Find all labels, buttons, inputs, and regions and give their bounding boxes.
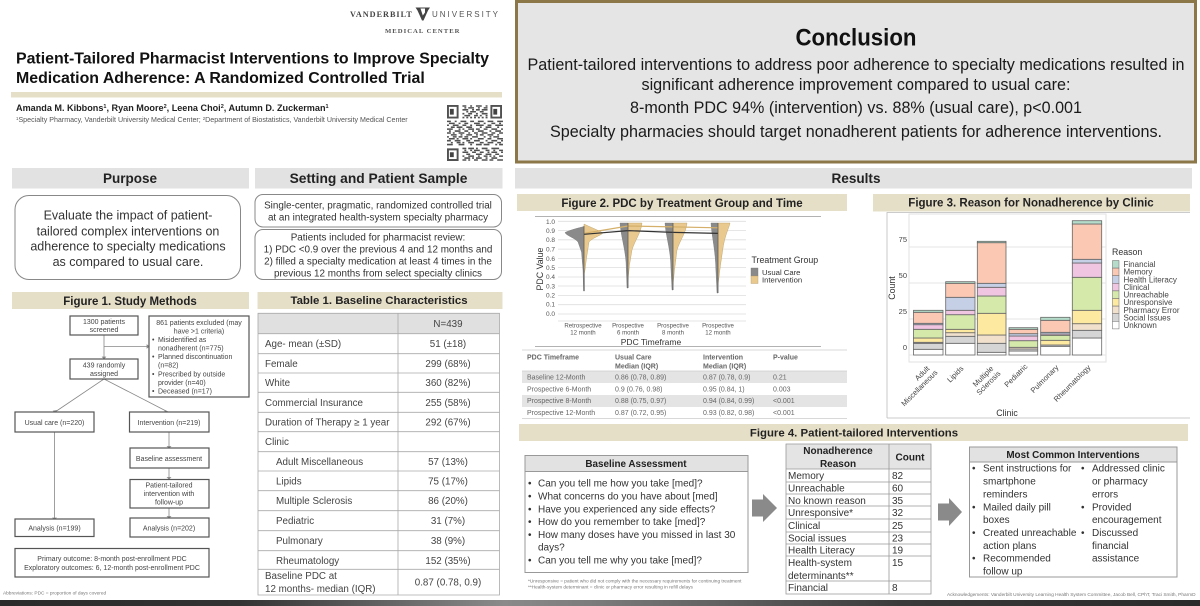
table 1 grid: 12 months- median (IQR) <box>265 584 376 595</box>
usual care violins <box>565 223 718 293</box>
nonadherence reason table: 25 <box>892 521 904 532</box>
table 1 grid: 255 (58%) <box>425 398 471 409</box>
x axis labels <box>564 322 735 336</box>
authors: 2 <box>164 104 167 110</box>
panel: setting and patient sample <box>255 168 502 280</box>
baseline assessment box: Can you tell me how you take [med]? <box>538 478 703 490</box>
most common interventions box: • <box>972 554 976 564</box>
box: outcomes: Primary outcome: 8-month post-enrollment PDC <box>37 556 187 563</box>
violin chart: 0.9 <box>546 228 555 235</box>
bar: pediatric <box>1009 328 1038 355</box>
x axis clinic labels: Sclerosis <box>975 369 1003 397</box>
most common interventions box: reminders <box>983 490 1027 500</box>
authors: 1 <box>103 104 106 110</box>
figure 3 heading: Figure 3. Reason for Nonadherence by Clinic <box>908 198 1154 210</box>
authors: Amanda M. Kibbons <box>16 103 103 113</box>
logo: Vanderbilt University Medical Center: UNIVERSITY <box>432 10 500 19</box>
panel: figure 2 PDC by treatment group and time <box>517 194 847 418</box>
box: outcomes: Exploratory outcomes: 6, 12-month post-enrollment PDC <box>24 565 200 572</box>
violin chart: PDC Timeframe <box>621 337 681 347</box>
table 1 grid: 292 (67%) <box>425 418 471 428</box>
panel: table 1 baseline characteristics <box>258 292 502 595</box>
most common interventions box: or pharmacy <box>1092 476 1148 488</box>
most common interventions box: Recommended <box>983 554 1051 564</box>
box: baseline assessment: Baseline assessment <box>136 456 202 463</box>
setting text: Single-center, pragmatic, randomized controlled trial <box>264 200 492 212</box>
violin chart: 0.2 <box>546 292 555 300</box>
baseline assessment box: days? <box>538 542 565 554</box>
most common interventions box: Addressed clinic <box>1092 464 1165 474</box>
table 1 grid: 360 (82%) <box>425 378 471 389</box>
most common interventions box <box>970 447 1177 578</box>
bar: multiple sclerosis <box>977 241 1006 355</box>
figure 2 table: Usual Care <box>615 354 652 362</box>
most common interventions box: boxes <box>983 515 1010 526</box>
nonadherence reason table: Unresponsive* <box>788 508 853 519</box>
bar: rheumatology <box>1072 221 1102 355</box>
baseline assessment box: • <box>528 478 532 490</box>
inclusion box <box>255 230 502 280</box>
figure 2 table: 0.88 (0.75, 0.97) <box>615 398 666 405</box>
violin chart: 1.0 <box>546 219 555 226</box>
figure 2 table: 0.93 (0.82, 0.98) <box>703 410 754 417</box>
most common interventions box: errors <box>1092 490 1118 500</box>
figure 2 heading: Figure 2. PDC by Treatment Group and Time <box>561 198 803 210</box>
conclusion text: 8-month PDC 94% (intervention) vs. 88% (usual care), p<0.001 <box>630 98 1082 117</box>
most common interventions box: • <box>972 528 976 539</box>
box: excluded: 861 patients excluded (may <box>156 320 242 327</box>
figure 2 table: Baseline 12-Month <box>527 374 585 382</box>
box: patient-tailored intervention: follow-up <box>155 500 183 506</box>
stacked bar chart <box>887 214 1106 418</box>
table 1 grid: Lipids <box>276 476 302 488</box>
most common interventions box: • <box>972 502 976 514</box>
nonadherence reason table: Health-system <box>788 558 852 569</box>
figure 2 table: 0.9 (0.76, 0.98) <box>615 386 662 394</box>
setting text: at an integrated health-system specialty pharmacy <box>268 212 488 224</box>
inclusion text: Patients included for pharmacist review: <box>291 232 465 244</box>
figure 3 legend: Unreachable <box>1124 291 1169 300</box>
baseline assessment box: Can you tell me why you take [med]? <box>538 556 702 566</box>
conclusion text: Specialty pharmacies should target nonadherent patients for adherence interventions. <box>550 122 1162 141</box>
most common interventions box: assistance <box>1092 554 1140 564</box>
affiliations: Specialty Pharmacy, Vanderbilt University Medical Center; <box>18 116 203 124</box>
affiliations: Department of Biostatistics, Vanderbilt University Medical Center <box>205 116 408 124</box>
title: Medication Adherence: A Randomized Controlled Trial <box>16 70 425 87</box>
figure 3 legend: Unresponsive <box>1124 298 1173 307</box>
x axis labels: 6 month <box>617 330 639 336</box>
figure 3 legend: Financial <box>1124 260 1156 269</box>
box: analysis usual care <box>15 519 94 536</box>
table 1 grid: 0.87 (0.78, 0.9) <box>415 578 481 588</box>
box: excluded: have >1 criteria) <box>174 328 224 336</box>
x axis labels: Prospective <box>612 322 645 330</box>
figure 2 table: Prospective 6-Month <box>527 386 591 394</box>
nonadherence reason table: 19 <box>892 546 904 556</box>
stacked bar chart: 75 <box>899 235 907 244</box>
authors: 2 <box>221 104 224 110</box>
table 1 heading: Table 1. Baseline Characteristics <box>290 295 468 307</box>
panel: purpose <box>12 168 249 280</box>
conclusion heading: Conclusion <box>796 24 916 52</box>
table 1 grid: White <box>265 378 291 389</box>
results heading: Results <box>832 171 880 186</box>
table 1 grid: 57 (13%) <box>428 457 468 468</box>
nonadherence reason table: 82 <box>892 471 904 482</box>
violin chart: 0.4 <box>546 274 555 281</box>
violin chart: 0.6 <box>546 256 555 263</box>
purpose heading: Purpose <box>103 171 157 186</box>
most common interventions box: encouragement <box>1092 515 1162 526</box>
x axis clinic labels: Pulmonary <box>1029 363 1061 395</box>
box: screened: screened <box>90 327 119 334</box>
box: randomized: assigned <box>90 371 118 378</box>
figure 2 table: 0.94 (0.84, 0.99) <box>703 398 754 405</box>
footnotes: **Health-system determinant = clinic or pharmacy error resulting in refill delays <box>528 584 693 590</box>
arrow: reasons to interventions <box>938 498 962 526</box>
title: Patient-Tailored Pharmacist Interventions to Improve Specialty <box>16 50 489 68</box>
abbreviations footnote: Abbreviations: PDC = proportion of days covered <box>3 590 106 596</box>
authors: , Ryan Moore <box>106 103 164 113</box>
figure 2 table: <0.001 <box>773 398 795 405</box>
authors: 1 <box>326 104 329 110</box>
nonadherence reason table: Memory <box>788 471 824 482</box>
most common interventions box: financial <box>1092 541 1129 552</box>
figure 2 table: Intervention <box>703 354 743 362</box>
x axis labels: Retrospective <box>564 322 602 330</box>
table 1 grid: Pediatric <box>276 516 314 527</box>
figure 2 legend: Usual Care <box>762 268 800 277</box>
box: excluded: • <box>152 388 155 396</box>
nonadherence reason table: Reason <box>820 459 856 470</box>
logo: Vanderbilt University Medical Center <box>350 8 500 35</box>
table 1 grid: Rheumatology <box>276 556 339 567</box>
figure 2 table: Median (IQR) <box>615 364 658 370</box>
figure 2 table <box>522 350 847 418</box>
table 1 grid: Adult Miscellaneous <box>276 457 363 468</box>
table 1 grid: Female <box>265 359 298 370</box>
stacked bar chart: 0 <box>903 343 907 352</box>
box: excluded <box>149 316 249 397</box>
icon: QR code <box>447 106 503 160</box>
results heading <box>515 168 1192 188</box>
inclusion text: 1) PDC <0.9 over the previous 4 and 12 months and <box>264 244 492 256</box>
purpose text: Evaluate the impact of patient- <box>44 208 212 222</box>
most common interventions box: follow up <box>983 566 1023 578</box>
figure 2 table: Prospective 8-Month <box>527 398 591 405</box>
box: screened: 1300 patients <box>83 319 126 326</box>
figure 2 legend <box>751 255 818 284</box>
nonadherence reason table: determinants** <box>788 571 854 582</box>
figure 2 table: 0.87 (0.78, 0.9) <box>703 374 750 382</box>
nonadherence reason table <box>786 444 931 594</box>
figure 2 table: Prospective 12-Month <box>527 410 595 417</box>
figure 2 table: 0.87 (0.72, 0.95) <box>615 410 666 417</box>
x axis clinic labels: Multiple <box>971 364 995 389</box>
purpose text: as compared to usual care. <box>53 255 203 269</box>
figure 2 table: 0.003 <box>773 386 791 394</box>
x axis labels: Prospective <box>702 322 735 330</box>
x axis labels: 12 month <box>705 330 731 336</box>
figure 2 table: 0.86 (0.78, 0.89) <box>615 374 666 382</box>
figure 2 table: PDC Timeframe <box>527 354 579 362</box>
table 1 grid: N=439 <box>433 319 463 330</box>
conclusion text <box>528 55 1184 141</box>
box: analysis intervention: Analysis (n=202) <box>143 526 195 532</box>
box: excluded: Planned discontinuation <box>158 354 232 361</box>
acknowledgements: Acknowledgements: Vanderbilt University Learning Health System Committee, Jacob Bell, CPhT, Traci Smith, PharmD <box>947 592 1196 598</box>
most common interventions box: smartphone <box>983 476 1036 488</box>
table 1 grid: Duration of Therapy ≥ 1 year <box>265 418 390 428</box>
nonadherence reason table: Clinical <box>788 521 820 532</box>
figure 2 table: P-value <box>773 354 798 362</box>
x axis clinic labels: Miscellaneous <box>899 368 940 408</box>
box: usual care: Usual care (n=220) <box>25 420 84 427</box>
x axis labels: Prospective <box>657 322 690 330</box>
panel: figure 3 reason for nonadherence by clinic <box>873 194 1190 418</box>
baseline assessment box: Have you experienced any side effects? <box>538 504 716 516</box>
nonadherence reason table: 8 <box>892 583 898 594</box>
nonadherence reason table: 23 <box>892 534 904 544</box>
box: outcomes <box>15 548 209 577</box>
box: excluded: • <box>152 337 155 344</box>
affiliations: 2 <box>203 116 206 121</box>
stacked bar chart: Clinic <box>996 408 1018 418</box>
box: patient-tailored intervention: Patient-tailored <box>145 482 193 490</box>
violin chart: 0.1 <box>546 302 555 308</box>
most common interventions box: • <box>1081 502 1085 514</box>
setting box <box>255 194 502 227</box>
x axis clinic labels <box>899 362 1093 408</box>
inclusion text: previous 12 months from select specialty clinics <box>274 268 482 280</box>
authors: , Leena Choi <box>167 103 221 113</box>
authors: , Autumn D. Zuckerman <box>224 103 326 113</box>
violin chart: 0.5 <box>546 265 555 272</box>
arrow: assessment to reasons <box>752 494 777 522</box>
table 1 grid: 299 (68%) <box>425 359 471 370</box>
violin chart: PDC Value <box>535 247 545 290</box>
most common interventions box: • <box>1081 464 1085 474</box>
box: excluded: Misidentified as <box>158 337 207 344</box>
figure 3 legend: Unknown <box>1124 321 1157 330</box>
most common interventions box: Created unreachable <box>983 528 1077 539</box>
figure 3 legend: Reason <box>1112 247 1142 257</box>
x axis clinic labels: Rheumatology <box>1052 363 1093 404</box>
figure 2 table: Median (IQR) <box>703 364 746 370</box>
stacked bar chart: 25 <box>899 307 907 316</box>
table 1 grid <box>258 313 500 595</box>
most common interventions box: • <box>972 464 976 474</box>
nonadherence reason table: 35 <box>892 496 904 507</box>
x axis labels: 8 month <box>662 330 684 336</box>
box: patient-tailored intervention: intervention with <box>144 491 194 498</box>
baseline assessment box: • <box>528 556 532 566</box>
logo: Vanderbilt University Medical Center: MEDICAL CENTER <box>385 28 460 35</box>
table 1 grid: 86 (20%) <box>428 496 468 507</box>
inclusion text: 2) filled a specialty medication at least 4 times in the <box>264 256 492 268</box>
nonadherence reason table: Nonadherence <box>803 446 873 457</box>
violin chart <box>535 219 746 347</box>
conclusion text: significant adherence improvement compared to usual care: <box>642 75 1070 94</box>
bar: adult miscellaneous <box>914 310 943 355</box>
most common interventions box: • <box>1081 528 1085 539</box>
box: usual care <box>15 412 94 432</box>
flowchart arrows <box>53 335 170 520</box>
x axis clinic labels: Pediatric <box>1002 362 1030 389</box>
box: excluded: Prescribed by outside <box>158 372 225 378</box>
violin chart: 0.0 <box>546 311 555 318</box>
table 1 grid: Pulmonary <box>276 536 323 547</box>
nonadherence reason table: Social issues <box>788 534 846 544</box>
most common interventions box: Provided <box>1092 502 1131 514</box>
baseline assessment box: How do you remember to take [med]? <box>538 517 706 528</box>
footer bar <box>0 600 1200 606</box>
figure 2 legend: Treatment Group <box>752 255 818 265</box>
most common interventions box: Discussed <box>1092 528 1138 539</box>
figure 4 heading: Figure 4. Patient-tailored Interventions <box>750 428 958 440</box>
table 1 grid: Clinic <box>265 437 289 448</box>
box: excluded: (n=82) <box>158 362 178 370</box>
baseline assessment box: • <box>528 530 532 541</box>
baseline assessment box: • <box>528 504 532 516</box>
x axis clinic labels: Adult <box>913 363 932 383</box>
nonadherence reason table: Health Literacy <box>788 546 855 556</box>
table 1 grid: 152 (35%) <box>425 556 471 567</box>
setting heading: Setting and Patient Sample <box>290 171 468 186</box>
box: analysis intervention <box>130 518 209 537</box>
box: baseline assessment <box>130 448 209 468</box>
most common interventions box: action plans <box>983 541 1036 552</box>
baseline assessment box: Baseline Assessment <box>585 459 687 470</box>
figure 1 heading: Figure 1. Study Methods <box>63 296 197 308</box>
most common interventions box: Mailed daily pill <box>983 502 1051 514</box>
table 1 grid: Commercial Insurance <box>265 398 364 409</box>
violin chart: 0.8 <box>546 237 555 244</box>
violin chart: 0.3 <box>546 284 555 290</box>
box: screened <box>70 316 138 335</box>
table 1 grid: Baseline PDC at <box>265 571 337 582</box>
affiliations: 1 <box>16 116 19 121</box>
stacked bar chart: 50 <box>899 271 907 280</box>
nonadherence reason table: Financial <box>788 583 828 594</box>
figure 2 table: <0.001 <box>773 410 795 417</box>
figure 3 legend: Social Issues <box>1124 314 1171 322</box>
x axis clinic labels: Lipids <box>945 364 966 384</box>
table 1 grid: Age- mean (±SD) <box>265 339 341 350</box>
table 1 grid: 75 (17%) <box>428 476 468 488</box>
bar: lipids <box>946 282 975 355</box>
figure 2 legend: Intervention <box>762 276 802 284</box>
figure 3 legend: Clinical <box>1124 283 1150 292</box>
stacked bar chart: Count <box>887 276 897 300</box>
purpose text: tailored complex interventions on <box>37 224 219 238</box>
box: intervention: Intervention (n=219) <box>138 420 200 427</box>
intervention violins <box>584 223 730 285</box>
box: excluded: • <box>152 372 155 378</box>
baseline assessment box: What concerns do you have about [med] <box>538 492 718 502</box>
violin chart: 0.7 <box>546 246 555 254</box>
table 1 grid: 38 (9%) <box>431 536 465 547</box>
purpose text: adherence to specialty medications <box>30 240 226 254</box>
x axis labels: 12 month <box>570 330 596 336</box>
box: analysis usual care: Analysis (n=199) <box>28 526 81 532</box>
figure 3 legend <box>1112 247 1180 330</box>
table 1 grid: Multiple Sclerosis <box>276 496 352 507</box>
box: excluded: Deceased (n=17) <box>158 388 212 396</box>
nonadherence reason table: Unreachable <box>788 484 845 494</box>
figure 2 table: 0.95 (0.84, 1) <box>703 386 745 394</box>
box: excluded: nonadherent (n=775) <box>158 346 224 352</box>
nonadherence reason table: Count <box>896 452 925 464</box>
box: randomized <box>70 359 138 379</box>
most common interventions box: Sent instructions for <box>983 464 1072 474</box>
panel: figure 1 study methods <box>12 292 249 577</box>
bar: pulmonary <box>1041 317 1070 355</box>
baseline assessment box: • <box>528 492 532 502</box>
figure 3 legend: Health Literacy <box>1124 275 1177 284</box>
figure 3 legend: Memory <box>1124 268 1152 277</box>
box: patient-tailored intervention <box>130 480 209 508</box>
footnotes: *Unresponsive = patient who did not comply with the necessary requirements for continuing treatment <box>528 578 742 584</box>
conclusion text: Patient-tailored interventions to address poor adherence to specialty medications resulted in <box>528 55 1184 74</box>
box: excluded: provider (n=40) <box>158 380 206 387</box>
table 1 grid: 51 (±18) <box>430 339 466 350</box>
nonadherence reason table: 32 <box>892 508 904 519</box>
panel: figure 4 patient-tailored interventions <box>519 424 1188 594</box>
purpose box <box>15 196 240 280</box>
baseline assessment box: • <box>528 517 532 528</box>
box: randomized: 439 randomly <box>83 362 126 370</box>
baseline assessment box: How many doses have you missed in last 30 <box>538 530 736 541</box>
logo: Vanderbilt University Medical Center: VANDERBILT <box>350 10 413 19</box>
table 1 grid: 31 (7%) <box>431 516 465 527</box>
most common interventions box: Most Common Interventions <box>1006 450 1140 461</box>
panel: conclusion <box>516 2 1196 162</box>
nonadherence reason table: 60 <box>892 484 904 494</box>
figure 2 table: 0.21 <box>773 374 787 382</box>
baseline assessment box <box>525 456 748 572</box>
nonadherence reason table: 15 <box>892 558 904 569</box>
figure 3 legend: Pharmacy Error <box>1124 306 1180 315</box>
box: excluded: • <box>152 354 155 361</box>
box: intervention <box>130 412 209 432</box>
nonadherence reason table: No known reason <box>788 496 866 507</box>
